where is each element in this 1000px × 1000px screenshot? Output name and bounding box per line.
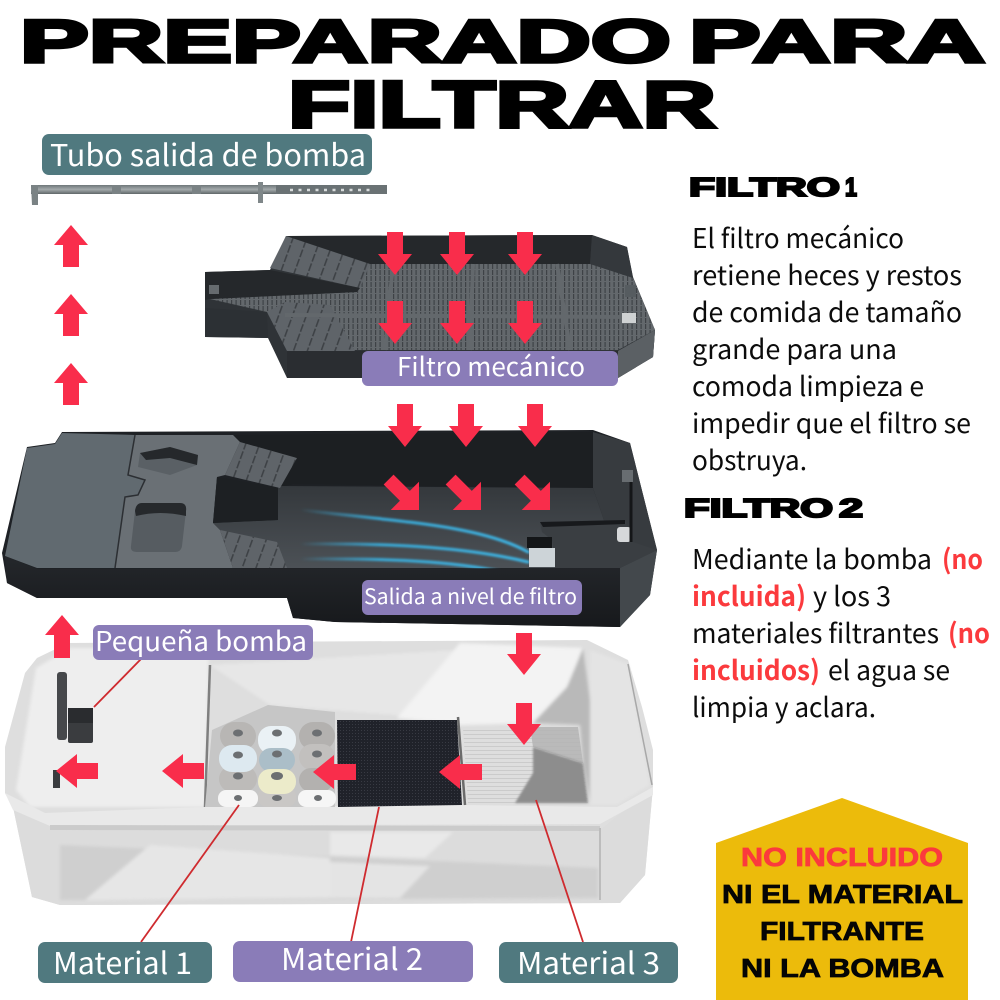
box interior shading <box>16 643 650 807</box>
label: filtro mecanico <box>362 347 618 386</box>
heading: filtro 1 <box>689 172 857 202</box>
material 2: black foam <box>337 717 465 807</box>
text: filtro 2 description: y los 3 <box>813 575 891 614</box>
text: filtro 1 description: El filtro mecánico <box>692 217 904 256</box>
heading: filtro 2: FILTRO <box>684 493 833 523</box>
front wall <box>5 556 620 627</box>
text: filtro 1 description: de comida de tamaño <box>692 291 962 330</box>
text: filtro 2 description: materiales filtrantes <box>692 612 939 651</box>
mechanical filter tray <box>205 235 655 378</box>
text: filtro 2 description: el agua se <box>828 649 950 688</box>
red pointer lines <box>94 659 583 942</box>
text: filtro 2 description: (no <box>942 538 983 577</box>
label: salida a nivel de filtro: Salida a nivel de filtro <box>364 581 577 611</box>
deck panels <box>5 433 145 568</box>
text: filtro 1 description: grande para una <box>692 328 897 367</box>
text: filtro 2 description: incluida) <box>692 575 806 614</box>
label: material 1: Material 1 <box>53 939 192 983</box>
material 3: white filter mesh <box>463 727 588 803</box>
label: material 2 <box>233 935 473 982</box>
arrows: upward flow to tube <box>54 225 88 405</box>
heading: filtro 2 <box>684 493 863 523</box>
callout: not included: NI EL MATERIAL <box>722 879 963 909</box>
text: filtro 1 description <box>692 217 971 478</box>
callout: not included: FILTRANTE <box>760 916 924 946</box>
box front face <box>5 787 653 905</box>
back wall and floor <box>233 432 593 488</box>
callout: not included <box>716 798 968 1000</box>
label: material 3: Material 3 <box>517 939 660 983</box>
text: filtro 2 description: limpia y aclara. <box>692 686 876 725</box>
title: PREPARADO <box>20 8 671 75</box>
label: pequena bomba: Pequeña bomba <box>95 620 307 659</box>
arrows: into large tray <box>374 404 564 524</box>
material 1: ceramic rings <box>205 705 336 807</box>
callout: not included: NI LA BOMBA <box>741 953 944 983</box>
blue water streaks <box>300 510 528 578</box>
icon: rectangular recess <box>131 503 186 552</box>
label: filtro mecanico: Filtro mecánico <box>397 347 585 384</box>
label: tubo salida de bomba: Tubo salida de bomba <box>50 131 366 175</box>
text: filtro 1 description: comoda limpieza e <box>692 365 924 404</box>
text: filtro 1 description: obstruya. <box>692 439 807 478</box>
icon: pump outlet tube <box>31 182 387 205</box>
text: filtro 2 description <box>692 538 990 725</box>
outlet platform <box>540 520 657 568</box>
icon: pump <box>53 672 93 788</box>
text: filtro 1 description: retiene heces y restos <box>692 254 962 293</box>
title: FILTRAR <box>288 67 716 141</box>
arrows: flow through sump <box>45 615 541 789</box>
heading: filtro 2: 2 <box>839 493 863 523</box>
title <box>20 8 985 141</box>
text: filtro 2 description: Mediante la bomba <box>692 538 932 577</box>
label: material 2: Material 2 <box>281 935 423 979</box>
heading: filtro 1: FILTRO <box>689 172 840 202</box>
text: filtro 1 description: impedir que el filtro se <box>692 402 971 441</box>
icon: hexagonal recess <box>138 447 198 475</box>
title: PARA <box>689 8 985 75</box>
heading: filtro 1: 1 <box>845 172 857 202</box>
arrows: into mechanical filter <box>378 232 542 344</box>
ramps and centre block <box>225 442 297 488</box>
text: filtro 2 description: (no <box>948 612 990 651</box>
bottom sump box <box>5 640 653 905</box>
large tray <box>2 430 657 627</box>
callout: not included: NO INCLUIDO <box>741 842 943 872</box>
text: filtro 2 description: incluidos) <box>692 649 820 688</box>
